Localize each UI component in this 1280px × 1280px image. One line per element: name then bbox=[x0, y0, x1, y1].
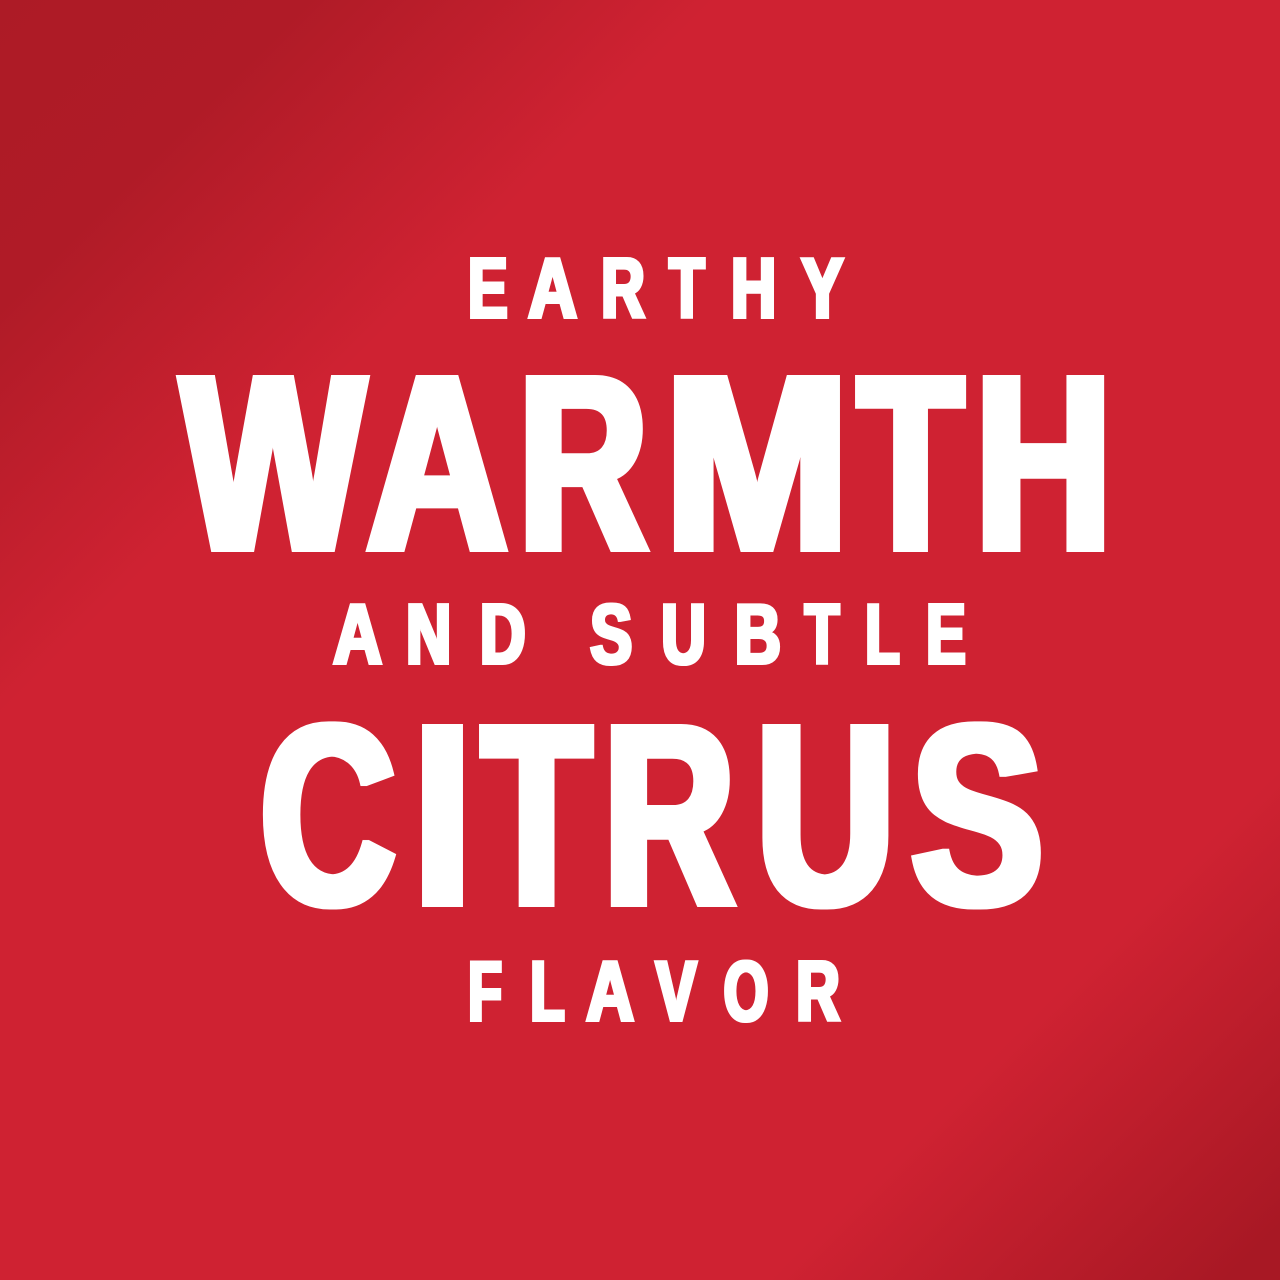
text line: AND SUBTLE: N bbox=[406, 586, 451, 682]
headline word: WARMTH: H bbox=[975, 324, 1112, 602]
text line: AND SUBTLE: L bbox=[865, 586, 900, 682]
text line: FLAVOR: R bbox=[796, 944, 840, 1040]
headline word: WARMTH: A bbox=[367, 324, 507, 602]
text line: AND SUBTLE: T bbox=[805, 586, 839, 682]
text line: AND SUBTLE: E bbox=[926, 586, 966, 682]
headline word: CITRUS: S bbox=[911, 671, 1043, 959]
headline word: CITRUS: R bbox=[604, 671, 735, 959]
headline word: WARMTH: M bbox=[665, 324, 849, 602]
headline word: WARMTH: R bbox=[519, 324, 647, 602]
text line: FLAVOR: A bbox=[586, 944, 634, 1040]
headline word: WARMTH: W bbox=[182, 324, 365, 602]
headline word: WARMTH: T bbox=[858, 324, 963, 602]
text line: EARTHY: E bbox=[468, 240, 508, 336]
headline word: CITRUS: C bbox=[260, 671, 396, 959]
text line: EARTHY: H bbox=[731, 240, 776, 336]
text line: AND SUBTLE: S bbox=[590, 586, 632, 682]
text line: FLAVOR: V bbox=[656, 944, 696, 1040]
text line: AND SUBTLE: B bbox=[735, 586, 781, 682]
text line: EARTHY: A bbox=[528, 240, 577, 336]
text line: AND SUBTLE: D bbox=[480, 586, 526, 682]
text line: EARTHY: T bbox=[669, 240, 704, 336]
headline word: CITRUS: T bbox=[482, 671, 591, 959]
text line: EARTHY: R bbox=[601, 240, 645, 336]
headline word: CITRUS: I bbox=[414, 671, 472, 959]
text line: AND SUBTLE: A bbox=[333, 586, 382, 682]
text line: AND SUBTLE: U bbox=[661, 586, 706, 682]
text line: FLAVOR: F bbox=[468, 944, 502, 1040]
headline word: CITRUS: U bbox=[756, 671, 895, 959]
text line: FLAVOR: L bbox=[530, 944, 565, 1040]
text line: FLAVOR: O bbox=[724, 944, 768, 1040]
text line: EARTHY: Y bbox=[802, 240, 843, 336]
